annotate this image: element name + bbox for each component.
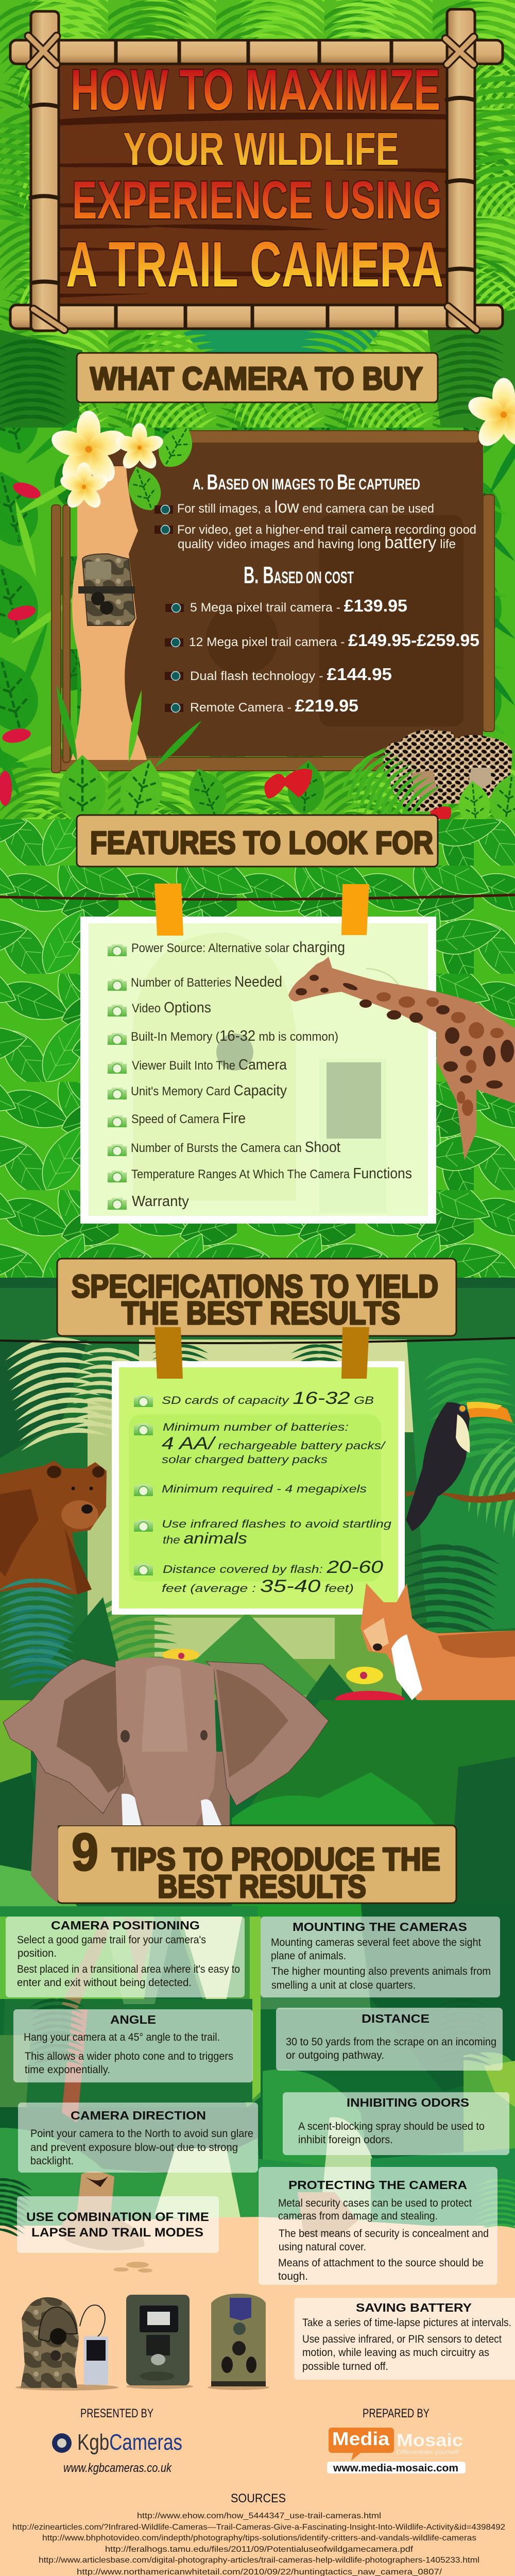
flower: right of heading (465, 378, 515, 451)
camera photos (15, 2294, 269, 2391)
tip: angle: time exponentially. (25, 2064, 110, 2076)
bullet video: quality video images and having long battery life (178, 533, 456, 552)
text: based on cost (165, 562, 479, 715)
heading plate: specifications: THE BEST RESULTS (122, 1296, 400, 1331)
heading plate: nine tips: BEST RESULTS (158, 1869, 366, 1905)
feature list (108, 939, 412, 1210)
tip: angle: This allows a wider photo cone and to triggers (25, 2050, 233, 2062)
tip: mounting the cameras: The higher mounting also prevents animals from (271, 1965, 491, 1977)
logo: media mosaic: Mosaic (397, 2431, 463, 2450)
spec list (134, 1388, 391, 1596)
logo: media mosaic (327, 2428, 466, 2474)
item: warranty (108, 1193, 189, 1210)
green camera (126, 2295, 190, 2385)
camouflage camera (211, 2294, 266, 2386)
heading plate: specifications (57, 1259, 456, 1336)
leaves and flower below panel (53, 684, 443, 852)
panel: features to look for (80, 917, 436, 1224)
item: temperature: Temperature Ranges At Which The Camera Functions (131, 1165, 412, 1182)
tip: combination of modes: LAPSE AND TRAIL MODES (31, 2226, 203, 2240)
giraffe (288, 957, 515, 1160)
clips: features card (154, 884, 369, 936)
heading plate: what camera to buy (77, 353, 438, 402)
background: elephant forest and tips jungle (0, 1700, 515, 2240)
heading plate: nine tips: TIPS TO PRODUCE THE (112, 1842, 440, 1877)
brown board (98, 441, 483, 756)
item: speed: Speed of Camera Fire (131, 1110, 246, 1127)
background: dark jungle behind specifications (0, 1278, 515, 1709)
sand ground (0, 2217, 515, 2576)
sources: http://ezinearticles.com/?Infrared-Wildlife-Cameras—Trail-Cameras-Give-a-Fascinating-Insight-Into-Wildlife-Activity&id=4398492 (12, 2523, 505, 2532)
tip: camera positioning: position. (18, 1947, 57, 1959)
trail camera on trunk (78, 554, 135, 625)
wood board (55, 63, 454, 308)
tip: camera direction: backlight. (30, 2155, 74, 2167)
tip: protecting the camera (259, 2167, 497, 2285)
item: megapixels (134, 1483, 367, 1496)
logo: kgb cameras: KgbCameras (77, 2430, 182, 2455)
tip: angle: Hang your camera at a 45° angle to the trail. (24, 2031, 220, 2043)
tip: saving battery: SAVING BATTERY (356, 2301, 472, 2314)
heading plate: features to look for: FEATURES TO LOOK FOR (90, 825, 433, 861)
item: megapixels: Minimum required - 4 megapixels (162, 1483, 367, 1495)
item: infrared: Use infrared flashes to avoid startling (162, 1518, 391, 1530)
item: warranty: Warranty (132, 1193, 189, 1210)
item: batteries: solar charged battery packs (162, 1454, 328, 1466)
tip: protecting the camera: cameras from damage and stealing. (278, 2210, 438, 2222)
item: power source: Power Source: Alternative solar charging (131, 939, 345, 956)
rope ties on corners (28, 36, 476, 330)
tip: combination of modes (17, 2196, 219, 2253)
item: distance: Distance covered by flash: 20-60 (163, 1557, 383, 1577)
text: based on images (154, 470, 476, 552)
tip: protecting the camera: tough. (278, 2270, 308, 2282)
tip: saving battery (294, 2298, 515, 2380)
camera watermark (129, 1414, 381, 1582)
panel: what camera to buy (52, 431, 494, 773)
camera watermark (133, 933, 401, 1213)
tip: mounting the cameras: plane of animals. (271, 1950, 346, 1962)
price row dual flash: Dual flash technology - £144.95 (190, 665, 392, 684)
jaguars (342, 730, 515, 838)
tree trunk (71, 466, 147, 760)
sources: http://www.ehow.com/how_5444347_use-trail-cameras.html (137, 2512, 381, 2520)
bullet video: For video, get a higher-end trail camera recording good (177, 523, 476, 537)
sources: http://www.articlesbase.com/digital-photography-articles/trail-cameras-help-wildlife-photographers-1405233.html (39, 2556, 479, 2565)
tip: mounting the cameras: MOUNTING THE CAMERAS (293, 1920, 467, 1934)
tip: camera positioning (6, 1917, 245, 1997)
item: batteries: Number of Batteries Needed (131, 974, 282, 990)
item: viewer: Viewer Built Into The Camera (132, 1057, 287, 1073)
credit: presented by: www.kgbcameras.co.uk (63, 2461, 173, 2475)
tip: mounting the cameras (261, 1917, 500, 1997)
tree stumps on sand (61, 2172, 358, 2250)
item: memory card: Unit's Memory Card Capacity (131, 1082, 287, 1099)
tip: inhibiting odors (283, 2092, 509, 2155)
item: batteries: 4 AA/ rechargeable battery packs/ (162, 1434, 386, 1453)
heading plate: nine tips: 9 (72, 1823, 98, 1882)
heading plate: features to look for (77, 815, 438, 867)
heading A: A. BASED ON IMAGES TO BE CAPTURED (193, 470, 420, 494)
item: infrared: the animals (163, 1529, 247, 1547)
clips: specifications card (154, 1327, 369, 1379)
logo: media mosaic: Differentiate yourself (397, 2449, 459, 2455)
tip: camera positioning: CAMERA POSITIONING (51, 1919, 200, 1932)
camo camera with remote (21, 2297, 108, 2388)
item: batteries: Minimum number of batteries: (163, 1421, 349, 1433)
tip: protecting the camera: The best means of security is concealment and (279, 2228, 489, 2240)
bullet video (154, 523, 476, 552)
price row 5 mega pixel: 5 Mega pixel trail camera - £139.95 (190, 596, 407, 615)
bear (0, 1461, 107, 1595)
tip: camera direction: and prevent exposure blow-out due to strong (30, 2142, 238, 2154)
panel: specifications (112, 1361, 405, 1615)
hanging rope: specifications (0, 1338, 515, 1343)
title (66, 58, 443, 300)
tip: protecting the camera: Means of attachment to the source should be (278, 2257, 484, 2269)
tip: distance: DISTANCE (362, 2012, 430, 2025)
background: tropical leaves beside buying panel (0, 409, 515, 824)
item: built-in memory: Built-In Memory (16-32 mb is common) (131, 1028, 338, 1044)
hanging rope: features (0, 895, 515, 900)
item: bursts: Number of Bursts the Camera can Shoot (131, 1139, 340, 1156)
item: distance (134, 1557, 383, 1596)
tip: angle: ANGLE (110, 2013, 156, 2026)
tip: protecting the camera: PROTECTING THE CAMERA (288, 2178, 467, 2192)
tip: camera positioning: Select a good game trail for your camera's (17, 1934, 206, 1946)
credit: presented by (52, 2406, 182, 2475)
price row 12 mega pixel: 12 Mega pixel trail camera - £149.95-£259.95 (189, 631, 479, 650)
item: sd cards: SD cards of capacity 16-32 GB (162, 1388, 374, 1408)
sources: SOURCES (231, 2492, 286, 2505)
credit: prepared by: PREPARED BY (363, 2406, 430, 2420)
tip: distance: 30 to 50 yards from the scrape on an incoming (286, 2036, 496, 2048)
item: infrared (134, 1518, 391, 1547)
tip: angle (13, 2009, 253, 2082)
heading B: B. BASED ON COST (244, 562, 354, 588)
tip: distance: or outgoing pathway. (286, 2049, 384, 2061)
bullet still images: For still images, a low end camera can be used (177, 497, 434, 516)
bamboo bars (52, 431, 494, 773)
card (80, 917, 436, 1224)
tip: camera positioning: enter and exit without being detected. (17, 1977, 192, 1989)
tip: mounting the cameras: Mounting cameras several feet above the sight (271, 1937, 481, 1948)
bamboo bottom bar (10, 304, 503, 330)
bamboo left post (29, 11, 60, 331)
sources (12, 2492, 505, 2576)
item: video options: Video Options (132, 999, 211, 1016)
sources: http://www.bhphotovideo.com/indepth/photography/tips-solutions/identify-critters-and-vandals-wildlife-cameras (42, 2534, 476, 2543)
credit: prepared by (327, 2406, 466, 2474)
tip: camera direction: CAMERA DIRECTION (71, 2109, 206, 2122)
heading plate: specifications: SPECIFICATIONS TO YIELD (72, 1269, 438, 1304)
tip: camera direction: Point your camera to the North to avoid sun glare (30, 2128, 253, 2140)
bamboo top bar (10, 39, 503, 65)
fox (360, 1583, 515, 1700)
tip: inhibiting odors: inhibit foreign odors. (298, 2134, 393, 2146)
background: green leaves behind features (0, 819, 515, 1283)
heading plate: nine tips (57, 1823, 456, 1905)
camera watermark (206, 515, 464, 726)
tip: inhibiting odors: A scent-blocking spray should be used to (298, 2121, 485, 2132)
tip: inhibiting odors: INHIBITING ODORS (347, 2096, 469, 2109)
title: YOUR WILDLIFE (123, 124, 399, 175)
credit: presented by: PRESENTED BY (80, 2406, 153, 2420)
tip: distance (276, 2008, 503, 2071)
sources: http://feralhogs.tamu.edu/files/2011/09/Potentialuseofwildgamecamera.pdf (105, 2545, 414, 2554)
logo: media mosaic: Media (332, 2428, 390, 2449)
tip: saving battery: motion, while leaving as much circuitry as (302, 2347, 489, 2359)
elephant (3, 1657, 329, 1903)
tip: protecting the camera: Metal security cases can be used to protect (278, 2197, 472, 2209)
plant in front of bear (0, 1579, 74, 1670)
card (112, 1361, 405, 1615)
heading plate: what camera to buy: WHAT CAMERA TO BUY (90, 361, 423, 397)
toucan on branch (406, 1402, 515, 1531)
tip: mounting the cameras: smelling a unit at close quarters. (271, 1979, 416, 1991)
item: batteries (134, 1421, 386, 1466)
price row remote camera: Remote Camera - £219.95 (190, 696, 358, 715)
tip: camera positioning: Best placed in a transitional area where it's easy to (17, 1963, 240, 1975)
title sign: bamboo frame and wood board (10, 9, 503, 331)
tip: protecting the camera: using natural cover. (279, 2241, 366, 2253)
logo: media mosaic: www.media-mosaic.com (333, 2463, 458, 2474)
bamboo right post (445, 9, 476, 329)
item: distance: feet (average : 35-40 feet) (162, 1577, 354, 1596)
tip: camera direction (18, 2103, 258, 2173)
tip: combination of modes: USE COMBINATION OF TIME (26, 2210, 209, 2224)
background: palm jungle behind title (0, 0, 515, 443)
flowers on tree (48, 411, 201, 515)
tip: saving battery: possible turned off. (302, 2361, 388, 2372)
